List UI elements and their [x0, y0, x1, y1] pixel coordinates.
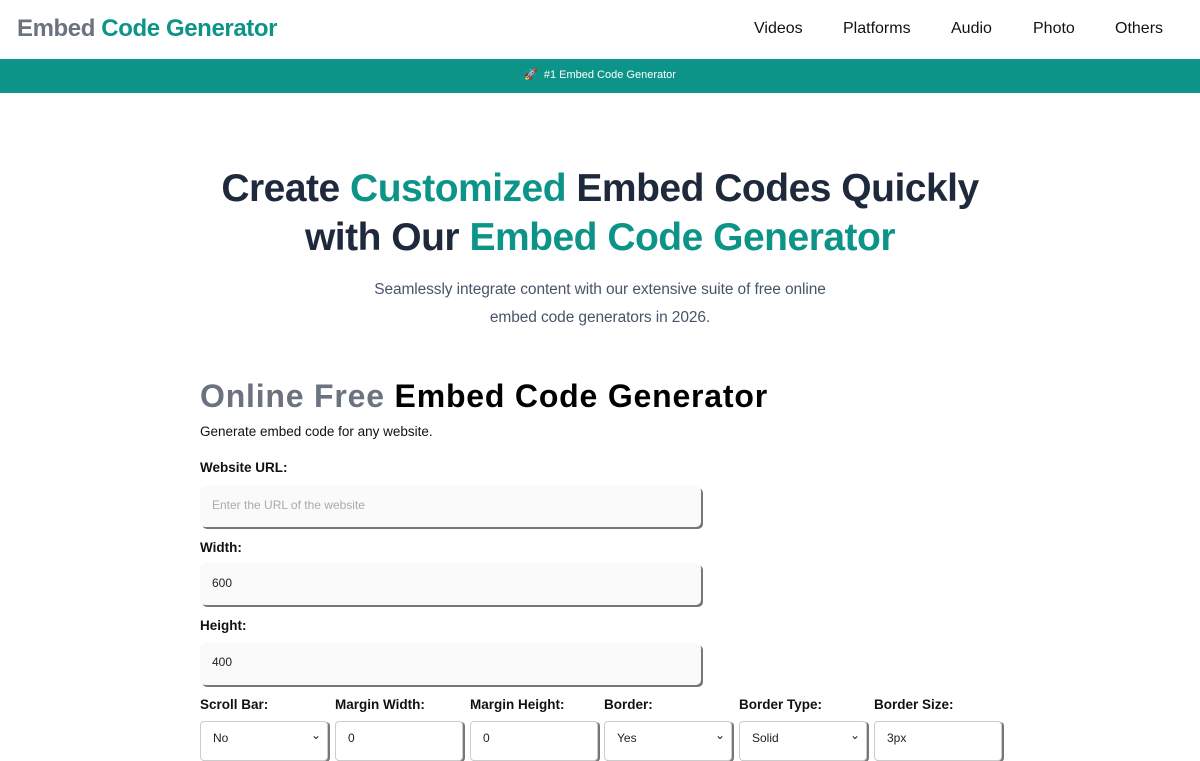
- input: margin width: [335, 721, 463, 761]
- select: scroll bar: [200, 721, 328, 761]
- nav menu: Others: [1115, 20, 1163, 37]
- nav menu: [754, 20, 1163, 37]
- field: height: [200, 618, 703, 687]
- field: width: [200, 540, 703, 607]
- field: height: Height:: [200, 618, 246, 633]
- input: margin width: 0: [348, 731, 355, 745]
- hero subtitle: embed code generators in 2026.: [490, 309, 710, 326]
- input: margin height: 0: [483, 731, 490, 745]
- options row: Margin Height:: [470, 697, 564, 712]
- select: border: [604, 721, 732, 761]
- input: border size: 3px: [887, 731, 906, 745]
- hero title: with Our Embed Code Generator: [305, 216, 895, 259]
- banner: [0, 59, 1200, 93]
- logo: Embed Code Generator: [17, 15, 277, 42]
- options row: Border Size:: [874, 697, 954, 712]
- select: border type: Solid: [752, 731, 779, 745]
- field: website url: Enter the URL of the website: [212, 498, 365, 512]
- hero subtitle: [374, 281, 826, 326]
- select: border: ⌄: [715, 728, 725, 742]
- hero title: Create Customized Embed Codes Quickly: [221, 167, 979, 210]
- field: website url: Website URL:: [200, 460, 288, 475]
- nav menu: Photo: [1033, 20, 1075, 37]
- options row: [200, 697, 954, 712]
- options row: Scroll Bar:: [200, 697, 268, 712]
- nav menu: Platforms: [843, 20, 911, 37]
- hero subtitle: Seamlessly integrate content with our extensive suite of free online: [374, 281, 826, 298]
- banner: 🚀 #1 Embed Code Generator: [524, 69, 676, 81]
- select: border type: [739, 721, 867, 761]
- select: scroll bar: ⌄: [311, 728, 321, 742]
- nav menu: Videos: [754, 20, 803, 37]
- select: scroll bar: No: [213, 731, 228, 745]
- nav menu: Audio: [951, 20, 992, 37]
- field: height: 400: [212, 655, 232, 669]
- description: Generate embed code for any website.: [200, 424, 433, 439]
- options row: Margin Width:: [335, 697, 425, 712]
- section heading: Online Free Embed Code Generator: [200, 378, 768, 414]
- hero title: [221, 167, 979, 259]
- field: website url: [200, 460, 703, 529]
- field: width: Width:: [200, 540, 242, 555]
- options row: Border:: [604, 697, 653, 712]
- select: border type: ⌄: [850, 728, 860, 742]
- select: border: Yes: [617, 731, 637, 745]
- input: border size: [874, 721, 1002, 761]
- input: margin height: [470, 721, 598, 761]
- options row: Border Type:: [739, 697, 822, 712]
- field: width: 600: [212, 576, 232, 590]
